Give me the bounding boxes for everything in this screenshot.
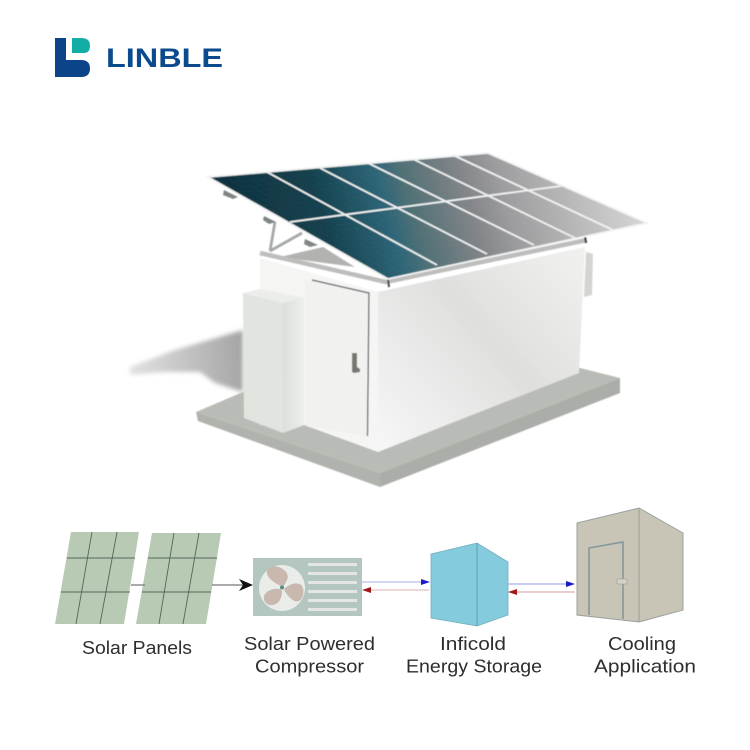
icon: solar panels [55,532,221,624]
equipment cabinet [243,289,304,433]
label: inficold energy storage: Energy Storage [406,656,542,676]
label: solar powered compressor: Compressor [255,656,364,676]
concrete slab [196,368,620,487]
icon: energy storage cube [431,543,508,626]
label: cooling application: Cooling [608,633,676,654]
roof mounting frame [223,190,587,287]
grille lines [308,563,357,611]
door [305,280,369,437]
logo mark [55,38,90,77]
door handle [352,353,360,373]
right side vent box [584,252,593,297]
ground shadow [130,330,243,392]
process flow diagram [55,508,696,676]
left wall [260,258,378,452]
logo: Linble [55,38,223,77]
arrows: compressor and storage [362,579,430,593]
icon: cooling room [577,508,683,622]
logo wordmark: LINBLE [106,43,223,73]
fan blades [264,566,303,605]
right wall [378,247,585,452]
label: inficold energy storage: Inficold [440,633,506,654]
label: cooling application: Application [594,656,696,676]
arrows: storage and cooling room [508,581,575,595]
panel frame and dividers [208,153,647,279]
solar array [208,153,647,279]
arrow: panels to compressor [131,579,253,591]
label: solar powered compressor: Solar Powered [244,633,375,654]
icon: compressor [253,558,362,616]
solar cold room product illustration [130,153,647,487]
label: solar panels: Solar Panels [82,637,192,658]
